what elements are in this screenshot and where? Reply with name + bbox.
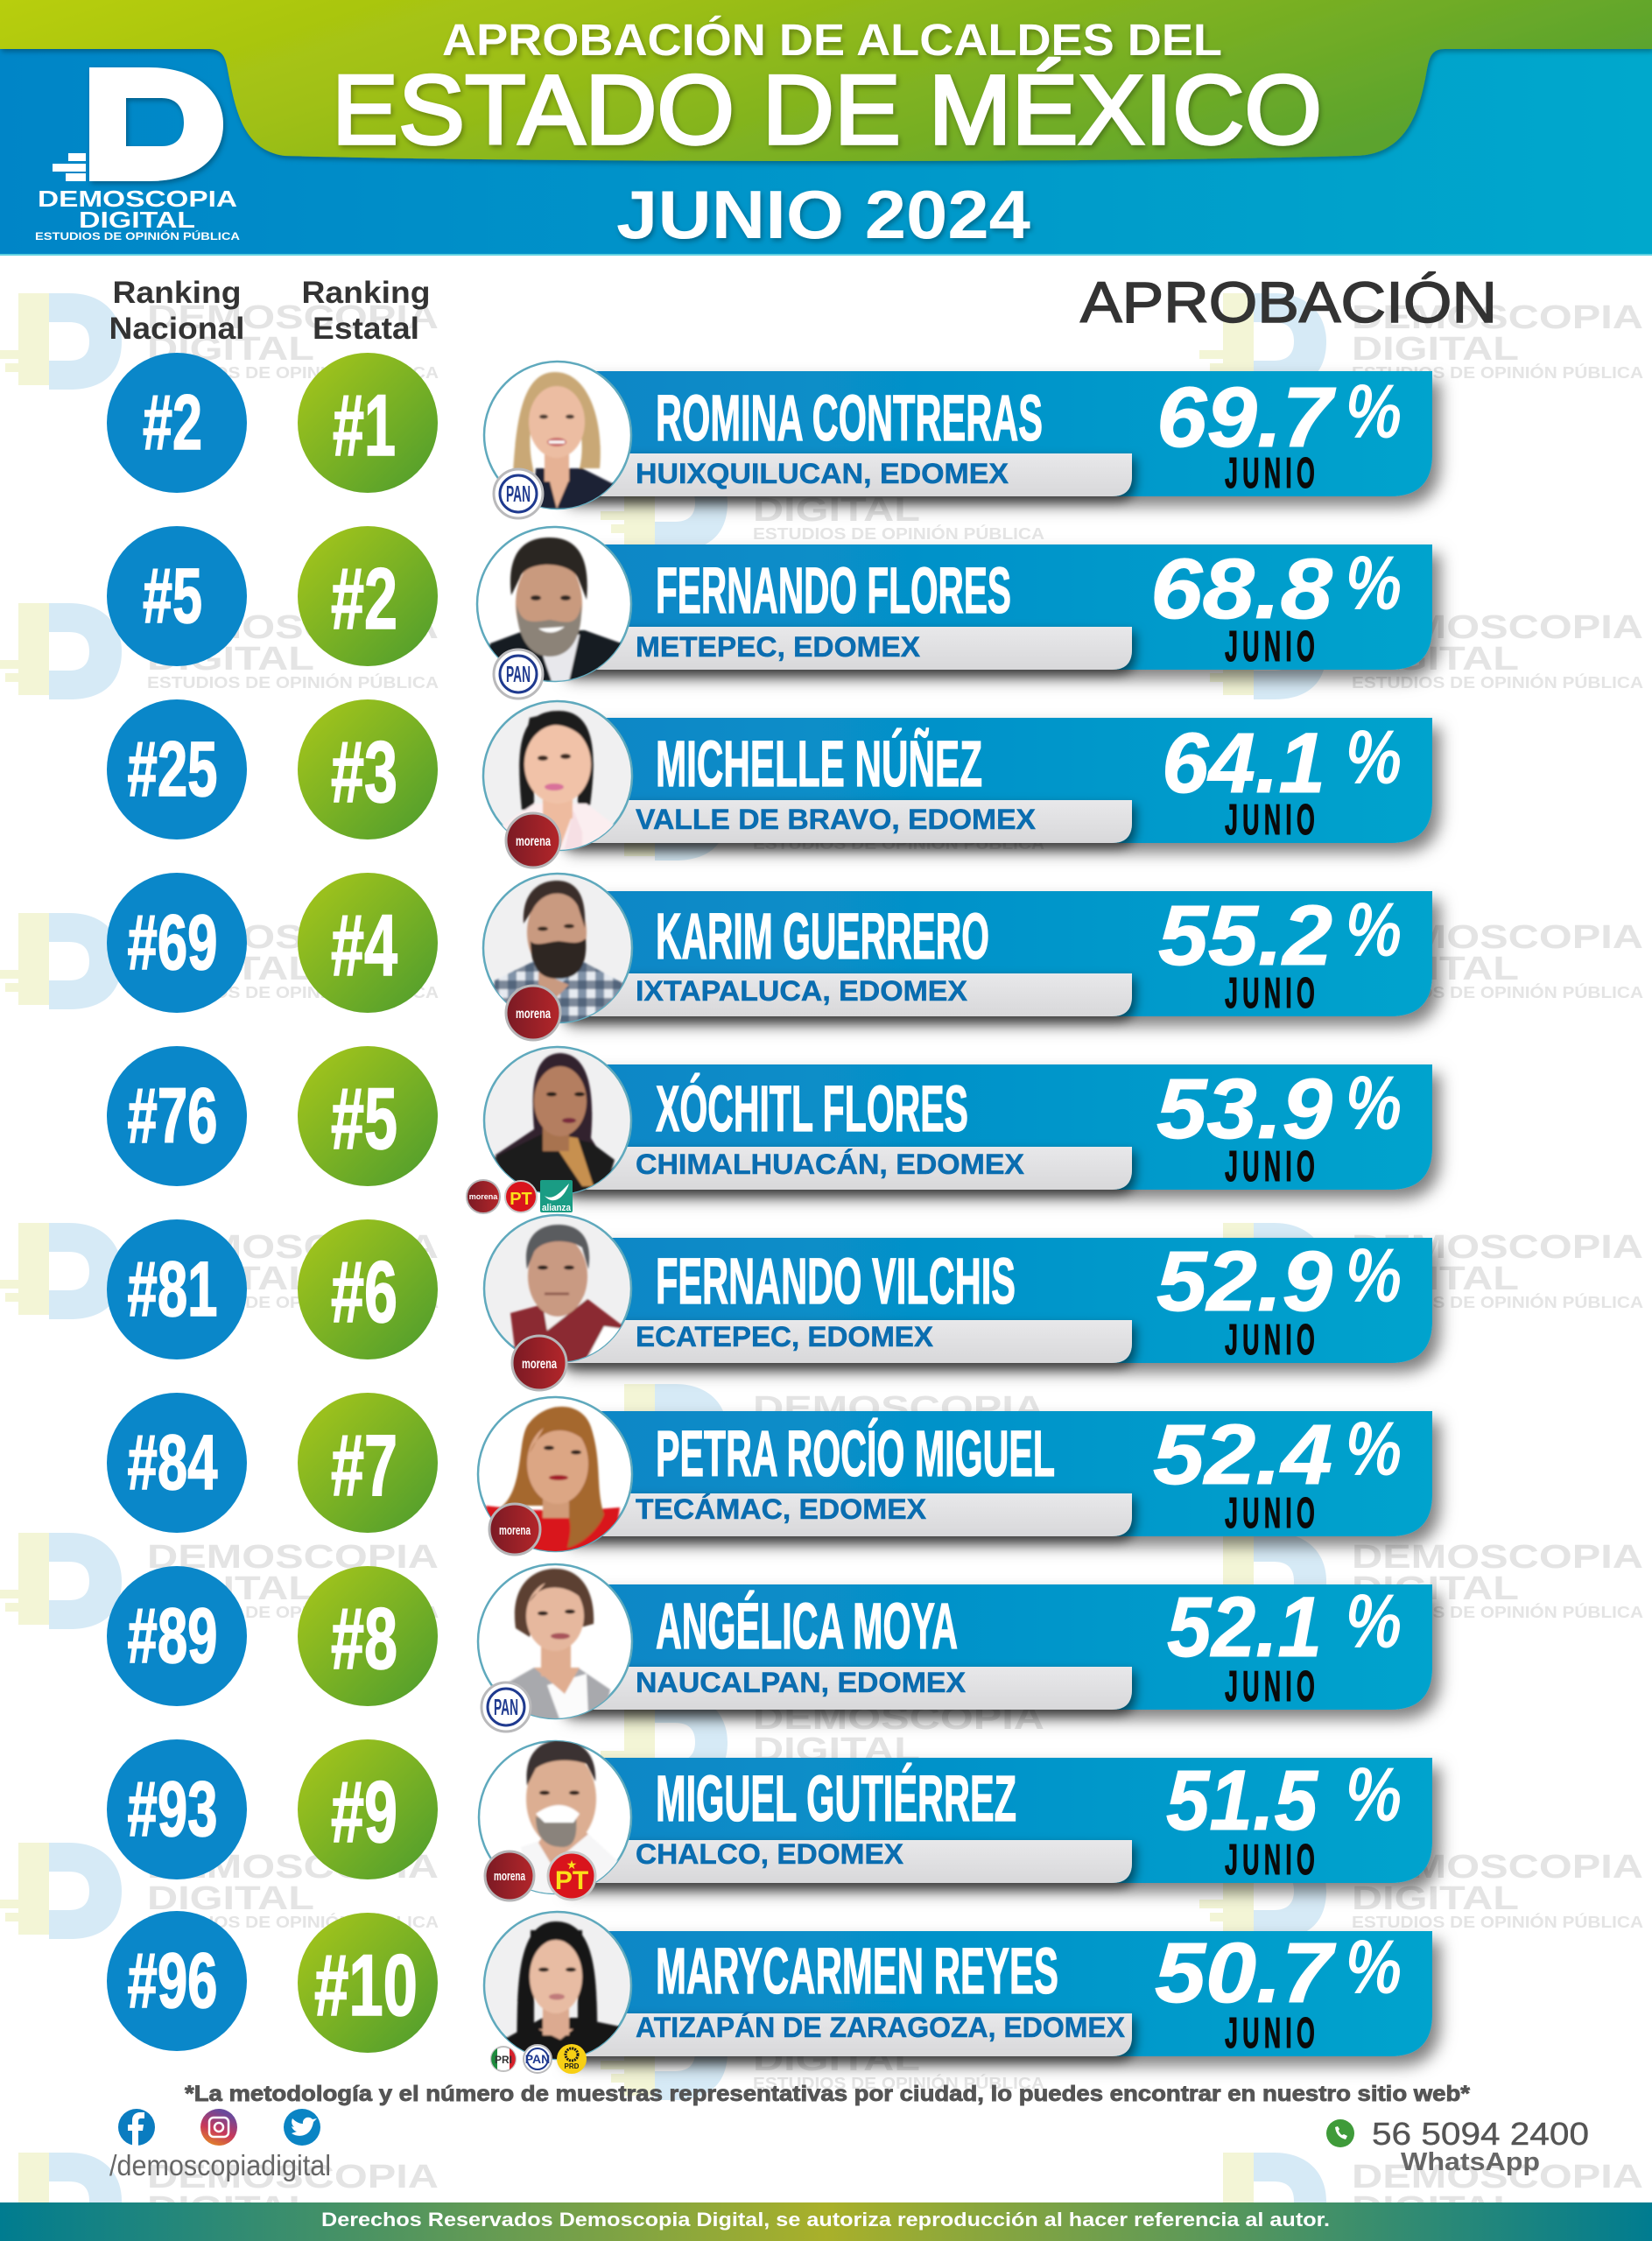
logo: Demoscopia Digital: DIGITAL: [79, 207, 195, 233]
watermark: left 3: DIGITAL: [147, 951, 314, 987]
watermark: left 6: ESTUDIOS DE OPINIÓN PÚBLICA: [147, 1913, 439, 1931]
bar: FERNANDO VILCHIS: [656, 1245, 1016, 1317]
logo: Demoscopia Digital: ESTUDIOS DE OPINIÓN PÚBLICA: [35, 229, 240, 242]
watermark: left 2: [0, 603, 439, 699]
bar: %: [1346, 1233, 1402, 1318]
watermark: middle 2: DIGITAL: [753, 802, 920, 839]
column heading: Ranking Estatal: Estatal: [313, 312, 419, 346]
watermark: right 5: DIGITAL: [1352, 1570, 1519, 1607]
state rank: #1: [333, 376, 396, 474]
watermark: right 3: DEMOSCOPIA: [1352, 919, 1643, 956]
watermark: middle 5: DEMOSCOPIA: [753, 1700, 1044, 1737]
national rank: #84: [128, 1418, 218, 1506]
state rank: #7: [331, 1416, 397, 1514]
icon: whatsapp: [1326, 2119, 1354, 2147]
badges: morena, PT, alianza: PT: [510, 1190, 532, 1209]
photo: [484, 1215, 631, 1362]
watermark: left 7: DIGITAL: [147, 2190, 314, 2227]
bar: ECATEPEC, EDOMEX: [636, 1321, 934, 1352]
watermark: middle 2: ESTUDIOS DE OPINIÓN PÚBLICA: [753, 834, 1044, 853]
national rank: #5: [143, 551, 202, 639]
watermark: middle 6: DIGITAL: [753, 2041, 920, 2078]
watermark: middle 4: DEMOSCOPIA: [753, 1390, 1044, 1427]
national rank: #76: [128, 1071, 217, 1159]
watermark: right 4: DEMOSCOPIA: [1352, 1229, 1643, 1266]
bar: JUNIO: [1225, 623, 1315, 671]
column heading: Ranking Nacional: Ranking: [112, 276, 242, 310]
bar: JUNIO: [1225, 1143, 1315, 1191]
bar: %: [1346, 1407, 1402, 1492]
badge: PAN: PAN: [494, 1694, 518, 1720]
watermark: right 1: DEMOSCOPIA: [1352, 299, 1643, 336]
watermark: middle 2: DEMOSCOPIA: [753, 770, 1044, 807]
badges: PRI, PAN, PRD: PAN: [525, 2052, 550, 2066]
watermark: right 5: [1199, 1533, 1643, 1629]
bar: NAUCALPAN, EDOMEX: [636, 1667, 967, 1698]
phone number: 56 5094 2400: [1372, 2116, 1589, 2152]
header band: [0, 0, 1652, 256]
badges: PRI, PAN, PRD: PRD: [565, 2062, 580, 2070]
bar: METEPEC, EDOMEX: [636, 631, 921, 663]
bar: 55.2: [1158, 888, 1332, 983]
watermark: left 2: DIGITAL: [147, 641, 314, 678]
watermark: middle 1: ESTUDIOS DE OPINIÓN PÚBLICA: [753, 524, 1044, 543]
watermark: right 2: [1199, 603, 1643, 699]
badge: morena: morena: [499, 1523, 531, 1538]
state rank: [298, 1913, 438, 2053]
watermark: right 7: [1199, 2153, 1643, 2241]
watermark: left 2: DEMOSCOPIA: [147, 609, 439, 646]
badge: PT: PT: [555, 1866, 588, 1895]
bar: 64.1: [1162, 715, 1325, 811]
watermark: middle 6: DEMOSCOPIA: [753, 2010, 1044, 2047]
watermark: right 1: ESTUDIOS DE OPINIÓN PÚBLICA: [1352, 363, 1643, 382]
watermark: left 5: DIGITAL: [147, 1570, 314, 1607]
national rank: [107, 1566, 247, 1706]
watermark: middle 3: DIGITAL: [753, 1112, 920, 1149]
bar: ROMINA CONTRERAS: [656, 382, 1043, 454]
column heading: Aprobación: APROBACIÓN: [1080, 270, 1497, 334]
watermark: middle 4: ESTUDIOS DE OPINIÓN PÚBLICA: [753, 1454, 1044, 1472]
watermark: left 5: ESTUDIOS DE OPINIÓN PÚBLICA: [147, 1603, 439, 1621]
national rank: #96: [128, 1936, 217, 2024]
watermark: right 1: DIGITAL: [1352, 331, 1519, 368]
watermark: right 7: DIGITAL: [1352, 2190, 1519, 2227]
photo: [477, 527, 631, 681]
watermark: left 1: DIGITAL: [147, 331, 314, 368]
national rank: [107, 699, 247, 839]
national rank: [107, 1739, 247, 1879]
row 10: Marycarmen Reyes: [107, 1911, 1432, 2074]
national rank: #25: [128, 725, 217, 812]
column heading: Ranking Estatal: Ranking: [301, 276, 431, 310]
bar: 69.7: [1156, 369, 1336, 465]
bar: 52.9: [1156, 1233, 1332, 1329]
national rank: #81: [128, 1245, 217, 1332]
watermark: right 2: ESTUDIOS DE OPINIÓN PÚBLICA: [1352, 673, 1643, 692]
watermark: left 5: DEMOSCOPIA: [147, 1539, 439, 1576]
title line 2: ESTADO DE MÉXICO: [332, 55, 1322, 165]
watermark: left 3: [0, 913, 439, 1009]
badge: PT: ★: [566, 1858, 577, 1872]
badge: PAN: [494, 469, 543, 518]
watermark: left 6: DEMOSCOPIA: [147, 1849, 439, 1886]
bar: 51.5: [1166, 1753, 1319, 1848]
state rank: [298, 353, 438, 493]
photo: [483, 701, 632, 854]
state rank: [298, 1219, 438, 1359]
bar: %: [1346, 1579, 1402, 1664]
bar: KARIM GUERRERO: [656, 900, 989, 973]
bar: [560, 541, 1432, 671]
bar: 53.9: [1156, 1061, 1332, 1156]
bar: CHIMALHUACÁN, EDOMEX: [636, 1149, 1025, 1180]
national rank: #93: [128, 1765, 217, 1852]
badges: morena, PT, alianza: [467, 1180, 573, 1213]
bar: MICHELLE NÚÑEZ: [656, 727, 982, 800]
watermark: middle 1: [601, 454, 1044, 551]
bar: ANGÉLICA MOYA: [656, 1590, 958, 1662]
watermark: right 4: DIGITAL: [1352, 1261, 1519, 1297]
watermark: middle 5: DIGITAL: [753, 1732, 920, 1768]
badge: morena: [512, 1336, 566, 1390]
national rank: #89: [128, 1591, 217, 1679]
bar: [560, 369, 1432, 497]
watermark: right 3: [1199, 913, 1643, 1009]
badge: morena: morena: [494, 1869, 525, 1884]
bar: [560, 1233, 1432, 1364]
bar: %: [1346, 541, 1402, 626]
bar: JUNIO: [1225, 1663, 1315, 1711]
state rank: [298, 1739, 438, 1879]
national rank: [107, 873, 247, 1013]
state rank: #8: [331, 1590, 397, 1687]
bar: TECÁMAC, EDOMEX: [636, 1493, 927, 1525]
state rank: [298, 526, 438, 666]
watermark: left 4: [0, 1223, 439, 1319]
watermark: right 6: DEMOSCOPIA: [1352, 1849, 1643, 1886]
watermark: middle 4: [601, 1384, 1044, 1480]
photo: [483, 874, 632, 1022]
watermark: middle 6: [601, 2004, 1044, 2100]
watermark: right 5: DEMOSCOPIA: [1352, 1539, 1643, 1576]
watermark: middle 5: ESTUDIOS DE OPINIÓN PÚBLICA: [753, 1764, 1044, 1782]
watermark: right 6: [1199, 1843, 1643, 1939]
badges: PRI, PAN, PRD: [491, 2044, 587, 2074]
national rank: [107, 526, 247, 666]
whatsapp label: WhatsApp: [1401, 2148, 1540, 2176]
watermark: right 3: DIGITAL: [1352, 951, 1519, 987]
row 7: Petra Rocío Miguel: [107, 1393, 1432, 1555]
state rank: #5: [331, 1070, 397, 1167]
state rank: #10: [314, 1936, 418, 2034]
methodology note: *La metodología y el número de muestras representativas por ciudad, lo puedes encontrar en nuestro sitio web*: [185, 2082, 1470, 2106]
bar: %: [1346, 1061, 1402, 1146]
bar: [560, 1579, 1432, 1711]
bar: [560, 1925, 1432, 2057]
badges: morena, PT, alianza: alianza: [542, 1203, 572, 1213]
social handle: /demoscopiadigital: [109, 2149, 331, 2181]
badge: morena: [506, 813, 560, 868]
badge: PAN: PAN: [506, 661, 531, 687]
national rank: #2: [143, 378, 202, 466]
bar: 50.7: [1155, 1925, 1336, 2020]
photo: [478, 1564, 632, 1721]
badge: PAN: PAN: [506, 481, 531, 507]
watermark: middle 3: ESTUDIOS DE OPINIÓN PÚBLICA: [753, 1144, 1044, 1163]
watermark: middle 3: DEMOSCOPIA: [753, 1080, 1044, 1117]
bar: IXTAPALUCA, EDOMEX: [636, 975, 968, 1007]
bar: CHALCO, EDOMEX: [636, 1838, 904, 1870]
state rank: [298, 1046, 438, 1186]
national rank: [107, 353, 247, 493]
watermark: middle 5: [601, 1694, 1044, 1790]
bar: PETRA ROCÍO MIGUEL: [656, 1417, 1055, 1490]
photo: [479, 1740, 631, 1895]
bar: JUNIO: [1225, 1837, 1315, 1884]
photo: [484, 1047, 631, 1195]
watermark: right 7: DEMOSCOPIA: [1352, 2159, 1643, 2195]
badge: morena: morena: [522, 1357, 557, 1372]
bar: JUNIO: [1225, 1490, 1315, 1537]
watermark: middle 4: DIGITAL: [753, 1422, 920, 1458]
row 2: Fernando Flores: [107, 526, 1432, 699]
watermark: left 6: DIGITAL: [147, 1880, 314, 1917]
icon: twitter: [284, 2109, 320, 2146]
watermark: left 2: ESTUDIOS DE OPINIÓN PÚBLICA: [147, 673, 439, 692]
badge: morena: morena: [516, 1007, 551, 1022]
bar: JUNIO: [1225, 970, 1315, 1017]
state rank: [298, 699, 438, 839]
title line 1: APROBACIÓN DE ALCALDES DEL: [442, 15, 1222, 65]
national rank: [107, 1911, 247, 2051]
watermark: right 4: ESTUDIOS DE OPINIÓN PÚBLICA: [1352, 1293, 1643, 1311]
badge: morena: morena: [516, 834, 551, 849]
icon: facebook: [118, 2109, 155, 2146]
watermark: right 6: DIGITAL: [1352, 1880, 1519, 1917]
bar: %: [1346, 1925, 1402, 2010]
watermark: left 3: DEMOSCOPIA: [147, 919, 439, 956]
badge: PAN: [494, 650, 543, 699]
national rank: #69: [128, 898, 217, 986]
watermark: middle 1: DEMOSCOPIA: [753, 460, 1044, 497]
badge: PT: [548, 1852, 595, 1900]
bar: XÓCHITL FLORES: [656, 1072, 968, 1145]
photo: [484, 362, 631, 509]
bar: %: [1346, 1753, 1402, 1837]
bar: MIGUEL GUTIÉRREZ: [656, 1762, 1016, 1835]
watermark: middle 2: [601, 764, 1044, 861]
bar: VALLE DE BRAVO, EDOMEX: [636, 804, 1037, 835]
watermark: left 1: [0, 293, 439, 390]
row 4: Karim Guerrero: [107, 873, 1432, 1040]
watermark: left 4: DIGITAL: [147, 1261, 314, 1297]
bar: 52.4: [1153, 1407, 1332, 1502]
watermark: left 4: DEMOSCOPIA: [147, 1229, 439, 1266]
badges: PRI, PAN, PRD: PRI: [495, 2054, 512, 2066]
badge: morena: [506, 986, 560, 1040]
watermark: right 2: DEMOSCOPIA: [1352, 609, 1643, 646]
state rank: #9: [331, 1763, 397, 1860]
badge: morena: [489, 1504, 540, 1555]
bar: %: [1346, 888, 1402, 973]
watermark: right 6: ESTUDIOS DE OPINIÓN PÚBLICA: [1352, 1913, 1643, 1931]
row 3: Michelle Núñez: [107, 699, 1432, 868]
watermark: right 4: [1199, 1223, 1643, 1319]
bar: 68.8: [1150, 541, 1332, 636]
watermark: left 1: DEMOSCOPIA: [147, 299, 439, 336]
national rank: [107, 1046, 247, 1186]
state rank: #6: [331, 1243, 397, 1340]
footer band: Derechos Reservados Demoscopia Digital, se autoriza reproducción al hacer referencia al autor.: [321, 2209, 1330, 2230]
watermark: middle 6: ESTUDIOS DE OPINIÓN PÚBLICA: [753, 2074, 1044, 2092]
footer band: [0, 2202, 1652, 2241]
watermark: left 7: [0, 2153, 439, 2241]
state rank: #3: [331, 723, 397, 820]
state rank: [298, 1566, 438, 1706]
bar: [560, 1061, 1432, 1191]
logo: Demoscopia Digital: DEMOSCOPIA: [38, 186, 237, 212]
watermark: right 3: ESTUDIOS DE OPINIÓN PÚBLICA: [1352, 983, 1643, 1001]
national rank: [107, 1219, 247, 1359]
row 1: Romina Contreras: [107, 353, 1432, 518]
bar: %: [1346, 715, 1402, 800]
watermark: left 3: ESTUDIOS DE OPINIÓN PÚBLICA: [147, 983, 439, 1001]
bar: FERNANDO FLORES: [656, 554, 1011, 627]
date: JUNIO 2024: [616, 176, 1030, 253]
watermark: left 5: [0, 1533, 439, 1629]
badge: morena: [485, 1851, 534, 1900]
photo: [484, 1912, 631, 2062]
row 6: Fernando Vilchis: [107, 1215, 1432, 1390]
bar: 52.1: [1167, 1579, 1322, 1675]
bar: HUIXQUILUCAN, EDOMEX: [636, 458, 1009, 489]
watermark: right 2: DIGITAL: [1352, 641, 1519, 678]
national rank: [107, 1393, 247, 1533]
watermark: middle 1: DIGITAL: [753, 492, 920, 529]
bar: JUNIO: [1225, 2010, 1315, 2057]
bar: [560, 888, 1432, 1017]
bar: JUNIO: [1225, 1317, 1315, 1364]
logo: Demoscopia Digital: [35, 67, 240, 242]
state rank: [298, 873, 438, 1013]
bar: %: [1346, 369, 1402, 454]
bar: JUNIO: [1225, 797, 1315, 844]
badge: PAN: [482, 1683, 531, 1732]
column heading: Ranking Estatal: [301, 276, 431, 346]
row 8: Angélica Moya: [107, 1564, 1432, 1732]
bar: [560, 1407, 1432, 1537]
bar: JUNIO: [1225, 450, 1315, 497]
state rank: #4: [331, 896, 397, 994]
column heading: Ranking Nacional: Nacional: [109, 312, 245, 346]
row 5: Xóchitl Flores: [107, 1046, 1432, 1213]
bar: [560, 715, 1432, 844]
watermark: right 5: ESTUDIOS DE OPINIÓN PÚBLICA: [1352, 1603, 1643, 1621]
watermark: left 6: [0, 1843, 439, 1939]
bar: [560, 1753, 1432, 1884]
icon: instagram: [200, 2109, 237, 2146]
photo: [478, 1397, 632, 1554]
state rank: [298, 1393, 438, 1533]
watermark: middle 3: [601, 1074, 1044, 1170]
bar: ATIZAPÁN DE ZARAGOZA, EDOMEX: [636, 2012, 1126, 2043]
watermark: left 7: DEMOSCOPIA: [147, 2159, 439, 2195]
state rank: #2: [331, 550, 397, 647]
watermark: left 1: ESTUDIOS DE OPINIÓN PÚBLICA: [147, 363, 439, 382]
bar: MARYCARMEN REYES: [656, 1935, 1058, 2007]
column heading: Ranking Nacional: [109, 276, 245, 346]
row 9: Miguel Gutiérrez: [107, 1739, 1432, 1900]
badges: morena, PT, alianza: morena: [469, 1192, 498, 1201]
watermark: left 4: ESTUDIOS DE OPINIÓN PÚBLICA: [147, 1293, 439, 1311]
watermark: right 1: [1199, 293, 1643, 390]
